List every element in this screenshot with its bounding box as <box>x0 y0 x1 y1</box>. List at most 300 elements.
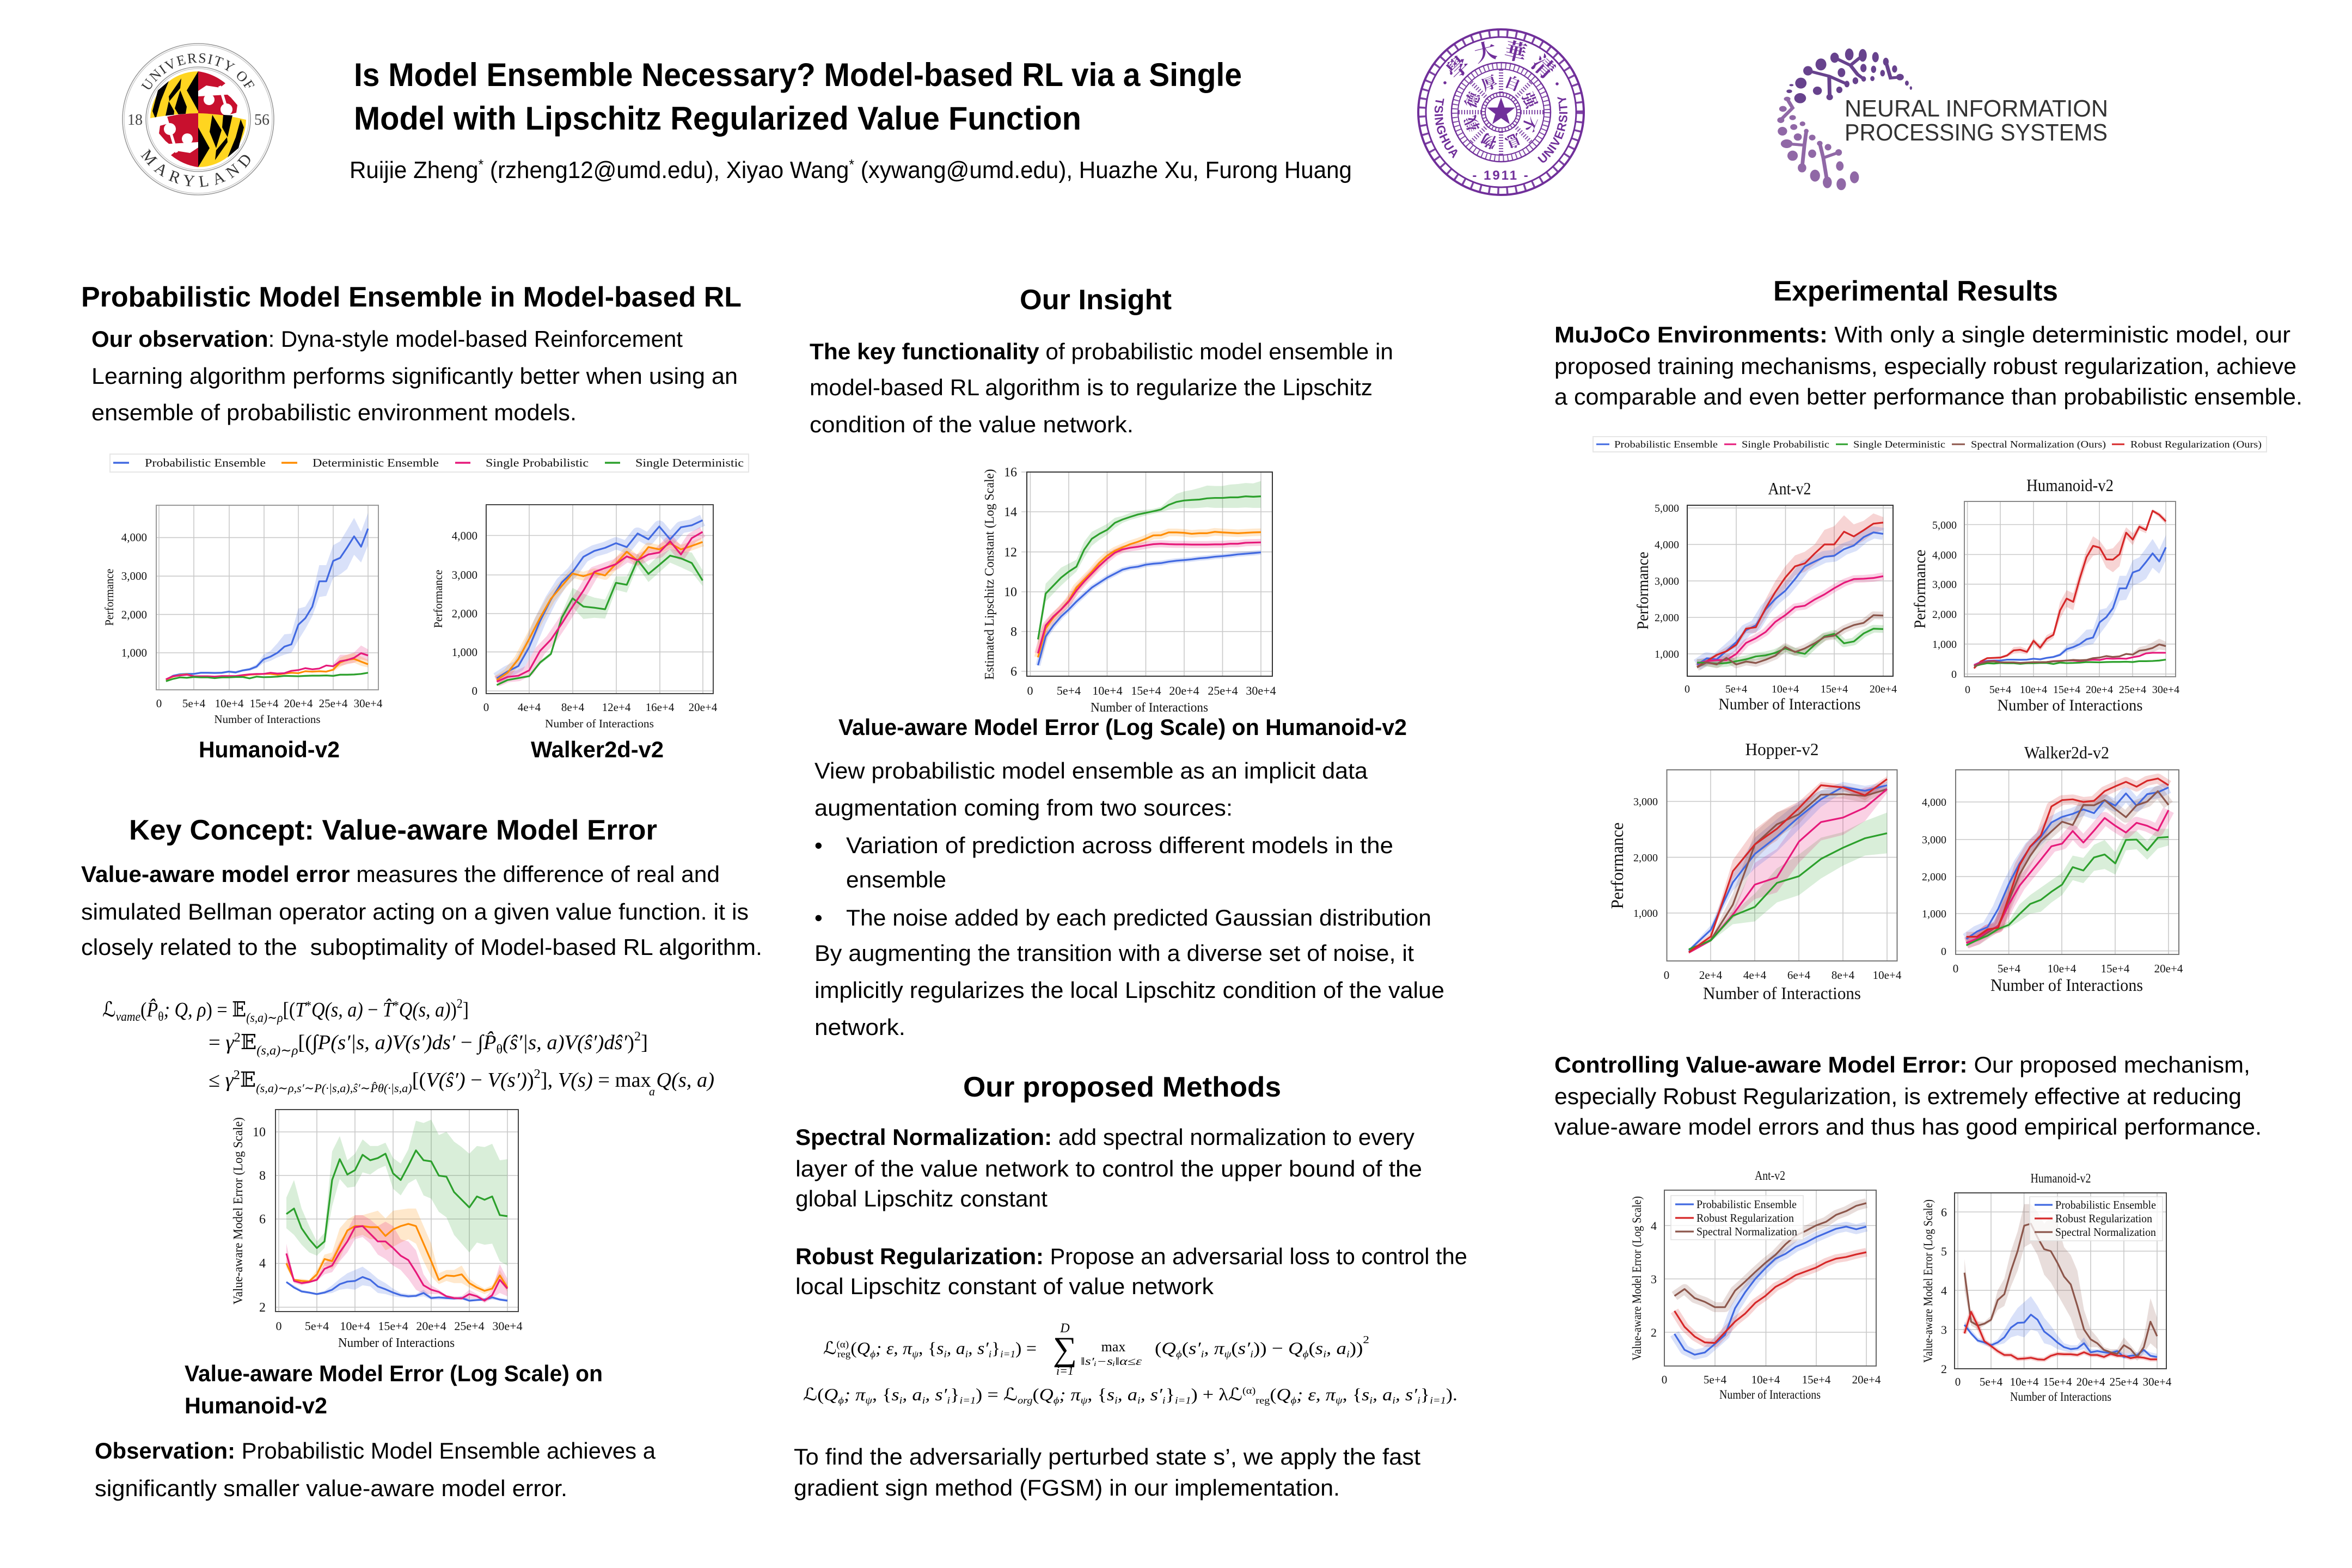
chart: Humanoid-v2 performance <box>102 505 383 726</box>
formula: robust regularization loss: ϕ <box>1176 1349 1182 1359</box>
chart: Ant-v2 value-aware model error: 10e+4 <box>1751 1373 1780 1386</box>
chart: Hopper-v2 performance: 2e+4 <box>1699 969 1723 982</box>
legend: four methods: Single Deterministic <box>635 456 744 469</box>
chart: Humanoid-v2 value-aware model error: Value-aware Model Error (Log Scale) <box>1921 1199 1935 1363</box>
formula: value-aware model error: ) <box>451 999 457 1021</box>
legend: Ant-v2: Robust Regularization <box>1696 1211 1794 1224</box>
text block: MuJoCo environments: a comparable and even better performance than probabilistic ensemble. <box>1554 384 2302 409</box>
formula: value-aware model error: T <box>295 999 307 1021</box>
legend: four methods <box>110 454 749 472</box>
logo: University of Maryland seal: UNIVERSITY OF <box>141 53 255 89</box>
chart: Humanoid-v2 performance with our methods: 5e+4 <box>1989 684 2011 696</box>
formula: robust regularization loss: ( <box>1270 1385 1276 1404</box>
chart: Ant-v2 value-aware model error: 0 <box>1662 1373 1667 1386</box>
chart: value-aware model error on Humanoid-v2: 0 <box>275 1319 282 1333</box>
chart: estimated Lipschitz constant: 14 <box>1004 505 1017 519</box>
formula: robust regularization loss: ; π <box>1059 1385 1081 1404</box>
chart: Ant-v2 value-aware model error: 4 <box>1651 1219 1657 1233</box>
panel: left column <box>81 281 762 1501</box>
chart: Hopper-v2 performance: 6e+4 <box>1787 969 1811 982</box>
formula: robust regularization loss: s′ <box>1238 1338 1251 1358</box>
chart: estimated Lipschitz constant: 8 <box>1010 625 1017 639</box>
text block: controlling value-aware model error: Controlling Value-aware Model Error: Our proposed mechanism, <box>1554 1052 2250 1077</box>
chart: Humanoid-v2 performance: 0 <box>156 697 162 710</box>
text block: implicit data augmentation: • <box>814 905 823 930</box>
formula: value-aware model error: 2 <box>457 997 463 1011</box>
formula: value-aware model error: * <box>305 999 311 1013</box>
legend: five methods: Robust Regularization (Ours) <box>2130 439 2262 450</box>
logo: Tsinghua University seal: 载 <box>1459 112 1485 135</box>
chart: Humanoid-v2 performance with our methods: Humanoid-v2 <box>2026 475 2114 495</box>
chart: estimated Lipschitz constant: 10e+4 <box>1092 684 1123 697</box>
chart: Ant-v2 value-aware model error: 3 <box>1651 1272 1657 1286</box>
chart: Walker2d-v2 performance with our methods: 20e+4 <box>2154 962 2183 975</box>
formula: robust regularization loss: , { <box>1087 1385 1107 1404</box>
formula: value-aware model error: 2 <box>534 1067 541 1081</box>
text block: our observation: Our observation: Dyna-style model-based Reinforcement <box>91 326 683 352</box>
text block: spectral normalization: layer of the value network to control the upper bound of the <box>795 1156 1422 1181</box>
legend: four methods: Deterministic Ensemble <box>313 456 439 469</box>
chart: Ant-v2 performance: Performance <box>1634 552 1652 629</box>
chart: Walker2d-v2 performance with our methods: 3,000 <box>1922 834 1946 846</box>
formula: value-aware model error: Q(s, a) <box>311 999 363 1021</box>
formula: robust regularization loss: i <box>1369 1395 1373 1406</box>
legend: Ant-v2: Spectral Normalization <box>1696 1225 1797 1238</box>
chart: Ant-v2 performance: Number of Interactions <box>1718 695 1861 713</box>
text block: robust regularization: local Lipschitz constant of value network <box>795 1273 1214 1299</box>
text block: FGSM: To find the adversarially perturbed state s’, we apply the fast <box>794 1444 1420 1469</box>
chart: Humanoid-v2 value-aware model error: 5e+4 <box>1980 1375 2003 1388</box>
text block: implicit data augmentation: ensemble <box>846 867 946 892</box>
formula: value-aware model error: (s,a)∼ρ <box>246 1011 283 1025</box>
text block: implicit data augmentation: network. <box>814 1014 905 1040</box>
chart: Humanoid-v2 performance: 4,000 <box>121 531 147 544</box>
text block: FGSM <box>794 1444 1420 1500</box>
formula: robust regularization loss: ψ <box>1081 1395 1088 1406</box>
formula: robust regularization loss: Q <box>857 1338 870 1358</box>
formula: value-aware model error: 2 <box>234 1031 241 1045</box>
chart: Humanoid-v2 value-aware model error: 4 <box>1941 1284 1947 1297</box>
formula: robust regularization loss: i <box>989 1349 991 1359</box>
chart: Humanoid-v2 value-aware model error <box>1921 1172 2172 1404</box>
formula: robust regularization loss: i=1 <box>1430 1395 1446 1406</box>
text block: our observation <box>91 326 738 425</box>
chart: Humanoid-v2 performance with our methods: 0 <box>1951 669 1957 681</box>
formula: value-aware model error: V(s) = max Q(s, a) <box>558 1069 714 1092</box>
logo: Tsinghua University seal: 物 <box>1478 128 1500 154</box>
formula: value-aware model error: θ <box>496 1043 503 1057</box>
formula: value-aware model error: − T̂ <box>368 999 394 1021</box>
formula: robust regularization loss: s <box>1315 1338 1323 1358</box>
logo: Tsinghua University seal: 强 <box>1517 89 1543 113</box>
chart: Hopper-v2 performance <box>1607 739 1902 1003</box>
chart: Ant-v2 performance: 20e+4 <box>1870 683 1897 695</box>
formula: robust regularization loss: ; π <box>844 1385 866 1404</box>
chart: Ant-v2 performance: 10e+4 <box>1772 683 1799 695</box>
formula: robust regularization loss: (α) <box>836 1339 849 1350</box>
heading: Experimental Results: Experimental Results <box>1773 275 2058 307</box>
formula: robust regularization loss: ( <box>1308 1338 1315 1358</box>
formula: robust regularization loss: i <box>922 1395 925 1406</box>
heading: Our proposed Methods: Our proposed Methods <box>963 1071 1281 1103</box>
chart: Walker2d-v2 performance: 4e+4 <box>518 701 541 714</box>
text block: implicit data augmentation <box>814 758 1444 1040</box>
chart: value-aware model error on Humanoid-v2: 2 <box>259 1301 266 1315</box>
logo: Tsinghua University seal: 自 <box>1502 70 1524 96</box>
chart: Walker2d-v2 performance with our methods: Number of Interactions <box>1990 975 2143 995</box>
chart: estimated Lipschitz constant: 12 <box>1004 546 1017 560</box>
chart: estimated Lipschitz constant: 10 <box>1004 585 1017 599</box>
chart: Ant-v2 performance: 1,000 <box>1655 648 1679 660</box>
text block: implicit data augmentation: View probabilistic model ensemble as an implicit data <box>814 758 1368 783</box>
authors: * <box>479 156 483 173</box>
chart: estimated Lipschitz constant: 20e+4 <box>1169 684 1199 697</box>
chart: value-aware model error on Humanoid-v2: 10 <box>253 1125 266 1140</box>
chart: estimated Lipschitz constant: 15e+4 <box>1131 684 1161 697</box>
formula: robust regularization loss: ( <box>1182 1338 1189 1358</box>
formula: robust regularization loss: i=1 <box>960 1395 976 1406</box>
chart: Walker2d-v2 performance: 0 <box>483 701 489 714</box>
chart: Hopper-v2 performance: 1,000 <box>1633 908 1658 920</box>
formula: robust regularization loss: i <box>1250 1349 1253 1359</box>
authors: (xywang@umd.edu), Huazhe Xu, Furong Huang <box>854 157 1352 183</box>
chart: Humanoid-v2 performance: Performance <box>102 568 116 626</box>
formula: robust regularization loss: s <box>1362 1385 1369 1404</box>
chart: Humanoid-v2 value-aware model error: 0 <box>1955 1375 1961 1388</box>
chart: Walker2d-v2 performance with our methods: 0 <box>1941 946 1946 958</box>
chart: Humanoid-v2 performance: 1,000 <box>121 646 147 659</box>
formula: value-aware model error: 2 <box>234 1068 240 1082</box>
caption: Humanoid-v2: Humanoid-v2 <box>199 737 340 762</box>
text block: controlling value-aware model error: value-aware model errors and thus has good empirical performance. <box>1554 1114 2262 1140</box>
chart: Walker2d-v2 performance: Number of Interactions <box>545 717 654 730</box>
chart: value-aware model error on Humanoid-v2: 8 <box>259 1169 266 1183</box>
formula: robust regularization loss: s <box>892 1385 899 1404</box>
chart: Humanoid-v2 performance: 10e+4 <box>215 697 244 710</box>
chart: estimated Lipschitz constant: 5e+4 <box>1057 684 1081 697</box>
legend: Ant-v2: Probabilistic Ensemble <box>1696 1198 1797 1211</box>
formula: robust regularization loss: ψ <box>1224 1349 1232 1359</box>
formula: robust regularization loss: i=1 <box>1056 1364 1074 1377</box>
chart: Hopper-v2 performance: Hopper-v2 <box>1745 739 1818 759</box>
formula: robust regularization loss: , π <box>1204 1338 1225 1358</box>
chart: Hopper-v2 performance: 4e+4 <box>1743 969 1767 982</box>
chart: Humanoid-v2 performance: 25e+4 <box>319 697 348 710</box>
chart: Humanoid-v2 performance with our methods: 0 <box>1965 684 1970 696</box>
chart: Humanoid-v2 performance with our methods: 10e+4 <box>2020 684 2047 696</box>
logo: Neural Information Processing Systems <box>1777 48 2108 190</box>
formula: robust regularization loss: ℒ(Q <box>803 1385 836 1404</box>
legend: four methods: Single Probabilistic <box>486 456 589 469</box>
text block: value-aware model error definition: closely related to the suboptimality of Model-based RL algorithm. <box>81 934 762 960</box>
formula: robust regularization loss: i <box>1162 1395 1166 1406</box>
chart: value-aware model error on Humanoid-v2: 30e+4 <box>492 1319 523 1333</box>
formula: robust regularization loss: , a <box>947 1338 965 1358</box>
text block: key functionality: The key functionality of probabilistic model ensemble in <box>810 339 1393 364</box>
formula: robust regularization loss: , a <box>1326 1338 1346 1358</box>
chart: value-aware model error on Humanoid-v2: 20e+4 <box>416 1319 446 1333</box>
logo: Neural Information Processing Systems: NEURAL INFORMATION <box>1845 95 2108 122</box>
formula: value-aware model error: a <box>649 1085 655 1098</box>
chart: Ant-v2 performance: 4,000 <box>1655 539 1679 551</box>
chart: Walker2d-v2 performance: 20e+4 <box>689 701 718 714</box>
formula: robust regularization loss: Q <box>1039 1385 1054 1404</box>
formula: value-aware model error: 2 <box>634 1030 641 1044</box>
text block: key functionality: model-based RL algorithm is to regularize the Lipschitz <box>810 375 1373 400</box>
text block: MuJoCo environments <box>1554 322 2302 409</box>
chart: Humanoid-v2 performance: Number of Interactions <box>215 713 320 726</box>
formula: value-aware model error: [( <box>283 999 295 1021</box>
legend: Ant-v2 <box>1671 1196 1803 1240</box>
formula: value-aware model error: V(ŝ′) − V(s′)) <box>426 1069 534 1092</box>
formula: robust regularization loss: , s′ <box>925 1385 948 1404</box>
text block: implicit data augmentation: By augmenting the transition with a diverse set of noise, it <box>814 940 1414 966</box>
text block: observation: Observation: Probabilistic Model Ensemble achieves a <box>95 1438 656 1463</box>
text block: value-aware model error definition <box>81 861 762 960</box>
chart: Humanoid-v2 value-aware model error: 5 <box>1941 1245 1947 1258</box>
chart: Humanoid-v2 performance with our methods: 25e+4 <box>2119 684 2146 696</box>
formula: robust regularization loss: i <box>1417 1395 1420 1406</box>
formula: value-aware model error: * <box>393 999 399 1013</box>
formula: robust regularization loss: s′ <box>1189 1338 1202 1358</box>
chart: Ant-v2 performance: 2,000 <box>1655 612 1679 624</box>
formula: robust regularization loss: org <box>1018 1395 1033 1406</box>
chart: Walker2d-v2 performance: 12e+4 <box>602 701 631 714</box>
formula: robust regularization loss: (α) <box>1242 1385 1255 1396</box>
text block: MuJoCo environments: proposed training mechanisms, especially robust regularization, achieve <box>1554 353 2296 379</box>
formula: value-aware model error: ) = 𝔼 <box>206 999 246 1021</box>
text block: value-aware model error definition: Value-aware model error measures the difference of real and <box>81 861 720 887</box>
chart: Ant-v2 performance: 5,000 <box>1655 503 1679 514</box>
text block: implicit data augmentation: Variation of prediction across different models in the <box>846 832 1393 858</box>
text block: value-aware model error definition: simulated Bellman operator acting on a given value function. it is <box>81 899 749 924</box>
formula: robust regularization loss: , { <box>1343 1385 1362 1404</box>
chart: Ant-v2 performance: Ant-v2 <box>1768 479 1811 498</box>
formula: robust regularization loss: ( <box>850 1338 857 1358</box>
formula: value-aware model error: vame <box>116 1010 140 1024</box>
formula: value-aware model error: θ <box>158 1010 164 1024</box>
chart: estimated Lipschitz constant: 25e+4 <box>1208 684 1238 697</box>
chart: Humanoid-v2 value-aware model error: 3 <box>1941 1323 1947 1337</box>
legend: five methods: Single Probabilistic <box>1742 439 1829 450</box>
chart: Humanoid-v2 performance with our methods: 2,000 <box>1932 609 1957 621</box>
formula: value-aware model error: ( <box>140 999 146 1021</box>
chart: Humanoid-v2 performance: 15e+4 <box>250 697 279 710</box>
chart: Ant-v2 performance: 0 <box>1685 683 1690 695</box>
formula: value-aware model error: (ŝ′|s, a)V(ŝ′)dŝ′ <box>503 1031 628 1054</box>
caption: value-aware model error chart <box>185 1361 603 1418</box>
chart: Hopper-v2 performance: Number of Interactions <box>1703 983 1861 1003</box>
chart: estimated Lipschitz constant: 0 <box>1027 684 1033 697</box>
formula: value-aware model error: P̂ <box>146 999 158 1021</box>
chart: estimated Lipschitz constant: 30e+4 <box>1246 684 1276 697</box>
text block: FGSM: gradient sign method (FGSM) in our implementation. <box>794 1475 1340 1500</box>
chart: estimated Lipschitz constant: Number of Interactions <box>1091 701 1208 715</box>
logo: University of Maryland seal: 18 <box>127 112 143 128</box>
logo: Tsinghua University seal: - 1911 - <box>1472 168 1530 183</box>
caption: value-aware model error chart: Value-aware Model Error (Log Scale) on <box>185 1361 603 1386</box>
chart: Ant-v2 performance: 15e+4 <box>1821 683 1848 695</box>
formula: robust regularization loss: i <box>947 1395 950 1406</box>
legend: Humanoid-v2: Robust Regularization <box>2055 1212 2152 1225</box>
formula: robust regularization loss: ψ <box>1336 1395 1343 1406</box>
formula: robust regularization loss: (Q <box>1155 1338 1174 1358</box>
formula: robust regularization loss: i <box>944 1349 947 1359</box>
chart: Humanoid-v2 value-aware model error: 15e+4 <box>2043 1375 2072 1388</box>
formula: value-aware model error: [( <box>412 1069 426 1092</box>
formula: robust regularization loss: ( <box>1033 1385 1039 1404</box>
formula: robust regularization loss: i <box>1346 1349 1350 1359</box>
formula: robust regularization loss: ψ <box>912 1349 919 1359</box>
legend: Humanoid-v2: Probabilistic Ensemble <box>2055 1198 2156 1211</box>
formula: robust regularization loss: ) + λℒ <box>1191 1385 1242 1404</box>
chart: Walker2d-v2 performance: 4,000 <box>452 529 477 542</box>
formula: value-aware model error: ≤ γ <box>209 1069 234 1092</box>
title: Is Model Ensemble Necessary? Model-based RL via a Single <box>354 57 1242 93</box>
text block: observation <box>95 1438 656 1501</box>
caption: Lipschitz chart: Value-aware Model Error (Log Scale) on Humanoid-v2 <box>838 714 1407 740</box>
chart: Humanoid-v2 value-aware model error: 30e+4 <box>2143 1375 2172 1388</box>
chart: Walker2d-v2 performance: 8e+4 <box>561 701 585 714</box>
formula: value-aware model error <box>102 997 714 1098</box>
formula: value-aware model error: P(s′|s, a)V(s′)ds′ − ∫P̂ <box>318 1031 496 1054</box>
chart: Ant-v2 performance: 5e+4 <box>1725 683 1747 695</box>
formula: value-aware model error: ; Q, ρ <box>164 999 206 1021</box>
chart: Hopper-v2 performance: Performance <box>1607 822 1627 909</box>
formula: robust regularization loss: , a <box>902 1385 922 1404</box>
formula: robust regularization loss: i=1 <box>1000 1349 1015 1359</box>
text block: observation: significantly smaller value-aware model error. <box>95 1475 567 1501</box>
formula: value-aware model error: (s,a)∼ρ,s′∼P(·|s,a),ŝ′∼P̂θ(·|s,a) <box>256 1081 412 1095</box>
chart: Ant-v2 value-aware model error: Number of Interactions <box>1719 1388 1821 1401</box>
text block: robust regularization: Robust Regularization: Propose an adversarial loss to control the <box>795 1244 1467 1269</box>
chart: Ant-v2 value-aware model error: Ant-v2 <box>1755 1169 1785 1183</box>
chart: Humanoid-v2 performance with our methods: Performance <box>1911 550 1929 628</box>
logo: Tsinghua University seal: 厚 <box>1478 70 1500 96</box>
formula: value-aware model error: 𝔼 <box>241 1031 256 1054</box>
text block: implicit data augmentation: implicitly regularizes the local Lipschitz condition of the value <box>814 977 1444 1003</box>
chart: Hopper-v2 performance: 0 <box>1664 969 1669 982</box>
formula: robust regularization loss: max <box>1101 1339 1125 1355</box>
chart: Hopper-v2 performance: 3,000 <box>1633 796 1658 808</box>
formula: robust regularization loss: ϕ <box>1303 1349 1308 1359</box>
formula: robust regularization loss: Q <box>1276 1385 1291 1404</box>
formula: value-aware model error: [(∫ <box>298 1031 319 1055</box>
formula: value-aware model error: 𝔼 <box>240 1069 256 1092</box>
formula: robust regularization loss: ϕ <box>1054 1395 1059 1406</box>
caption: Walker2d-v2: Walker2d-v2 <box>531 737 664 762</box>
chart: Humanoid-v2 performance with our methods: 4,000 <box>1932 549 1957 561</box>
chart: Walker2d-v2 performance: 0 <box>471 684 477 697</box>
authors: * <box>849 156 854 173</box>
chart: Walker2d-v2 performance: Performance <box>431 569 445 628</box>
chart: Walker2d-v2 performance with our methods: 15e+4 <box>2101 962 2130 975</box>
panel: middle column <box>794 284 1467 1500</box>
chart: Ant-v2 performance <box>1634 479 1897 713</box>
text block: implicit data augmentation: augmentation coming from two sources: <box>814 795 1233 820</box>
formula: robust regularization loss: i <box>899 1395 902 1406</box>
chart: Walker2d-v2 performance with our methods: 5e+4 <box>1998 962 2021 975</box>
formula: value-aware model error: Q(s, a) <box>399 999 451 1021</box>
chart: Humanoid-v2 value-aware model error: Number of Interactions <box>2010 1390 2111 1404</box>
chart: value-aware model error on Humanoid-v2: 10e+4 <box>340 1319 370 1333</box>
chart: Humanoid-v2 performance with our methods <box>1911 475 2179 714</box>
formula: value-aware model error: = γ <box>209 1031 234 1054</box>
formula: robust regularization loss: i <box>1201 1349 1204 1359</box>
chart: Ant-v2 value-aware model error: 5e+4 <box>1704 1373 1727 1386</box>
formula: robust regularization loss <box>803 1321 1457 1406</box>
chart: Humanoid-v2 performance with our methods: 15e+4 <box>2053 684 2080 696</box>
chart: estimated Lipschitz constant: 6 <box>1010 665 1017 679</box>
legend: four methods: Probabilistic Ensemble <box>145 456 266 469</box>
text block: controlling value-aware model error <box>1554 1052 2262 1140</box>
logo: University of Maryland seal <box>122 43 274 195</box>
chart: Humanoid-v2 value-aware model error: 6 <box>1941 1205 1947 1219</box>
chart: value-aware model error on Humanoid-v2: Value-aware Model Error (Log Scale) <box>231 1117 246 1304</box>
title <box>354 57 1242 137</box>
text block: our observation: ensemble of probabilistic environment models. <box>91 400 577 425</box>
chart: Walker2d-v2 performance with our methods: 2,000 <box>1922 871 1946 883</box>
formula: robust regularization loss: } <box>991 1338 1000 1358</box>
logo: Tsinghua University seal: 息 <box>1501 128 1524 155</box>
text block: MuJoCo environments: MuJoCo Environments: With only a single deterministic model, our <box>1554 322 2290 347</box>
legend: five methods: Probabilistic Ensemble <box>1614 439 1718 450</box>
chart: Hopper-v2 performance: 8e+4 <box>1832 969 1855 982</box>
logo: Tsinghua University seal: UNIVERSITY <box>1538 97 1568 163</box>
chart: estimated Lipschitz constant <box>983 465 1276 715</box>
chart: Walker2d-v2 performance: 16e+4 <box>646 701 675 714</box>
formula: robust regularization loss: ) = <box>1015 1338 1037 1358</box>
text block: spectral normalization <box>795 1124 1422 1211</box>
formula: robust regularization loss: i <box>1323 1349 1326 1359</box>
formula: robust regularization loss: } <box>1420 1385 1430 1404</box>
formula: robust regularization loss: ℒ <box>823 1338 836 1358</box>
chart: Walker2d-v2 performance with our methods: 10e+4 <box>2048 962 2077 975</box>
logo: Neural Information Processing Systems: PROCESSING SYSTEMS <box>1845 119 2108 146</box>
formula: robust regularization loss: )) <box>1350 1338 1363 1358</box>
text block: implicit data augmentation: The noise added by each predicted Gaussian distribution <box>846 905 1431 930</box>
chart: Ant-v2 value-aware model error: 20e+4 <box>1852 1373 1881 1386</box>
formula: robust regularization loss: ϕ <box>1291 1395 1296 1406</box>
formula: robust regularization loss: s <box>1107 1385 1114 1404</box>
formula: robust regularization loss: ψ <box>865 1395 873 1406</box>
chart: Humanoid-v2 performance with our methods: 1,000 <box>1932 639 1957 651</box>
formula: robust regularization loss: , a <box>1373 1385 1392 1404</box>
text block: spectral normalization: Spectral Normalization: add spectral normalization to every <box>795 1124 1414 1150</box>
heading: Probabilistic Model Ensemble in Model-based RL: Probabilistic Model Ensemble in Model-based RL <box>81 281 742 313</box>
chart: Walker2d-v2 performance with our methods: 4,000 <box>1922 797 1946 808</box>
chart: Walker2d-v2 performance: 1,000 <box>452 646 477 659</box>
chart: Humanoid-v2 value-aware model error: 10e+4 <box>2010 1375 2039 1388</box>
formula: robust regularization loss: , s′ <box>1395 1385 1418 1404</box>
panel: right column <box>1554 275 2302 1404</box>
legend: five methods <box>1593 437 2267 452</box>
formula: robust regularization loss: ϕ <box>838 1395 844 1406</box>
logo: Tsinghua University seal <box>1417 28 1585 196</box>
chart: Humanoid-v2 performance with our methods: 3,000 <box>1932 579 1957 591</box>
logo: University of Maryland seal: 56 <box>254 112 270 128</box>
chart: estimated Lipschitz constant: 16 <box>1004 465 1017 480</box>
authors: (rzheng12@umd.edu), Xiyao Wang <box>483 157 849 183</box>
chart: value-aware model error on Humanoid-v2: 25e+4 <box>454 1319 485 1333</box>
chart: Humanoid-v2 value-aware model error: 20e+4 <box>2077 1375 2105 1388</box>
text block: implicit data augmentation: • <box>814 832 823 858</box>
chart: Hopper-v2 performance: 10e+4 <box>1873 969 1902 982</box>
formula: robust regularization loss: , a <box>1118 1385 1137 1404</box>
text block: our observation: Learning algorithm performs significantly better when using an <box>91 363 738 389</box>
chart: Humanoid-v2 performance: 30e+4 <box>354 697 383 710</box>
formula: robust regularization loss: ∑ <box>1053 1331 1077 1368</box>
